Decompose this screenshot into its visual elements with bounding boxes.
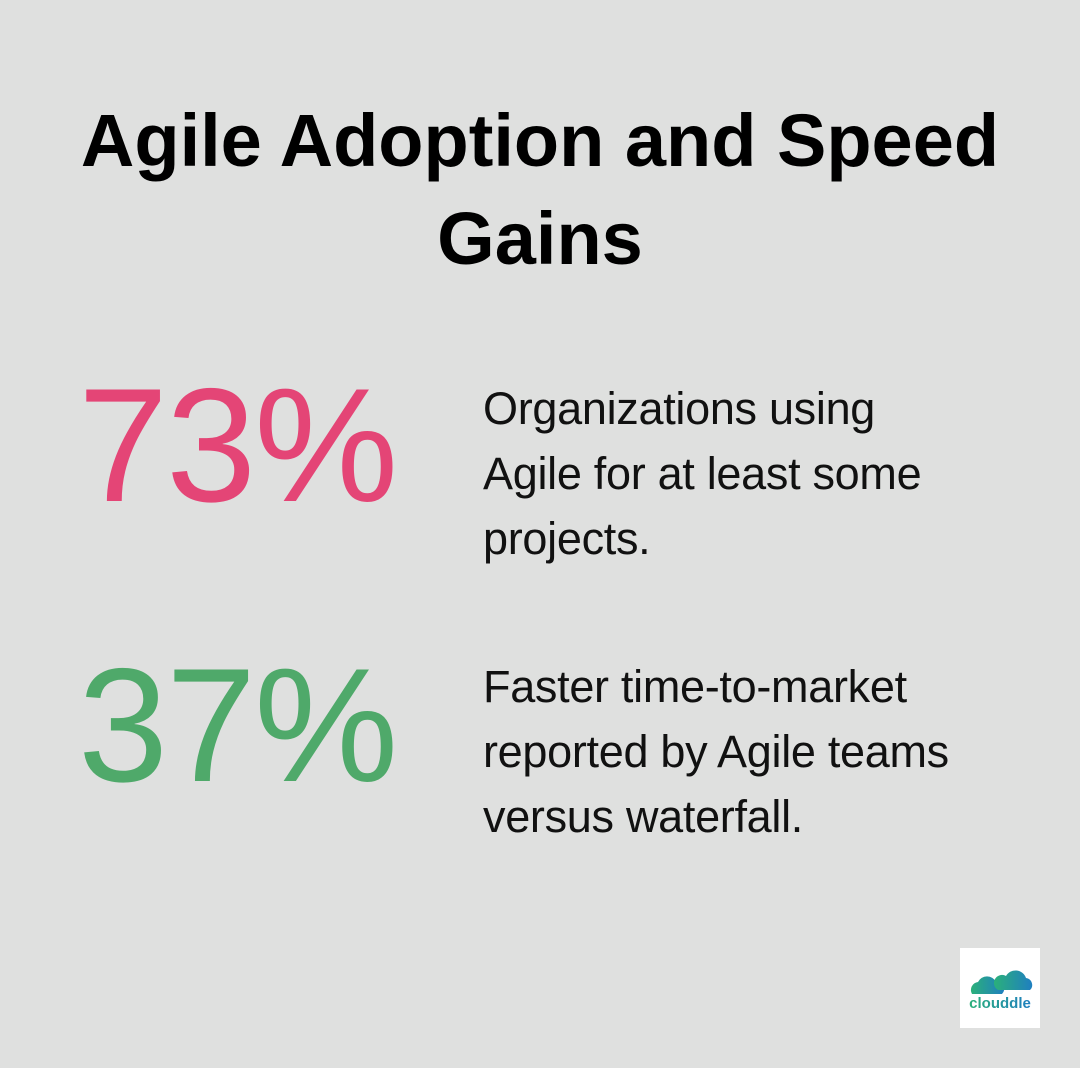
text: 37% description bbox=[483, 661, 949, 842]
title: Agile Adoption and Speed bbox=[81, 99, 999, 182]
logo: clouddle: clouddle bbox=[969, 995, 1031, 1012]
text: 73% description: Agile for at least some bbox=[483, 448, 921, 499]
text: 73% description: Organizations using bbox=[483, 383, 875, 434]
text: 37% description: versus waterfall. bbox=[483, 791, 803, 842]
text: 37% description: Faster time-to-market bbox=[483, 661, 907, 712]
title bbox=[81, 99, 999, 280]
stat: 73%: 73% bbox=[78, 355, 396, 536]
title: Gains bbox=[437, 197, 643, 280]
logo: clouddle bbox=[960, 948, 1040, 1028]
text: 73% description: projects. bbox=[483, 513, 650, 564]
text: 37% description: reported by Agile teams bbox=[483, 726, 949, 777]
text: 73% description bbox=[483, 383, 921, 564]
stat: 37%: 37% bbox=[78, 635, 396, 816]
